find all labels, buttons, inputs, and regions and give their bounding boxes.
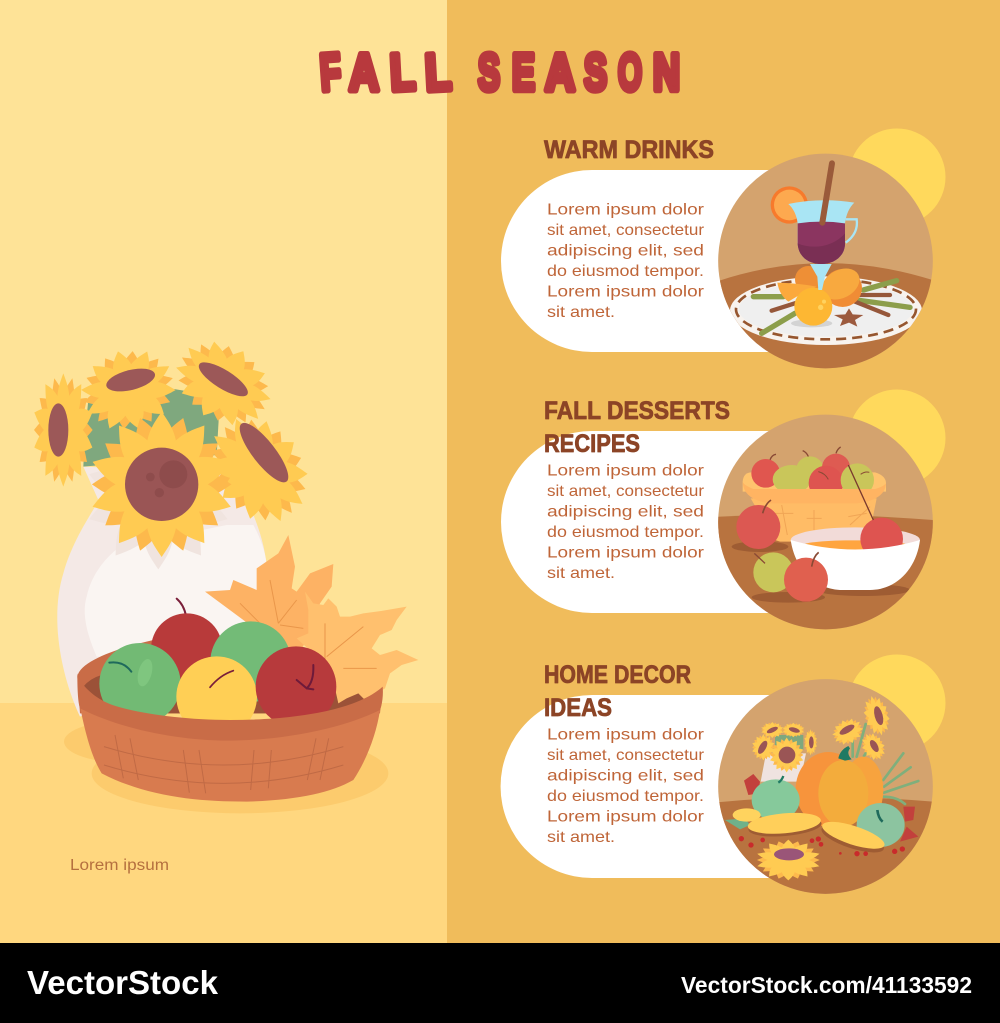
panel: fall desserts recipes xyxy=(501,390,946,635)
heading: home decor ideas xyxy=(501,654,946,878)
heading: fall desserts recipes: FALL DESSERTS xyxy=(544,397,730,425)
white text pill xyxy=(501,431,800,613)
body text: sit amet, consectetur xyxy=(547,483,705,500)
title: S xyxy=(584,44,607,102)
body text xyxy=(547,202,705,321)
title: F xyxy=(318,43,343,103)
body text: sit amet. xyxy=(547,565,615,582)
basket weave xyxy=(104,735,343,793)
sunflower top left xyxy=(59,328,198,452)
body text xyxy=(547,726,705,846)
sunflower right xyxy=(172,382,344,558)
green foliage xyxy=(83,388,220,467)
title: L xyxy=(389,43,417,102)
vase xyxy=(57,424,267,717)
heading: home decor ideas: HOME DECOR xyxy=(544,661,691,689)
basket body xyxy=(80,707,380,802)
right background xyxy=(447,0,1000,943)
body text: Lorem ipsum dolor xyxy=(547,462,705,480)
body text: adipiscing elit, sed xyxy=(547,768,704,784)
body text: adipiscing elit, sed xyxy=(547,242,704,260)
panel: home decor ideas xyxy=(501,654,946,900)
white text pill xyxy=(501,695,800,878)
heading: warm drinks: WARM DRINKS xyxy=(544,136,714,164)
body text: Lorem ipsum dolor xyxy=(547,726,705,744)
basket rim xyxy=(77,673,383,741)
title: O xyxy=(618,44,642,102)
footer url: VectorStock.com/41133592 xyxy=(681,972,972,998)
body text: sit amet, consectetur xyxy=(547,222,705,239)
title: A xyxy=(545,44,575,102)
footer bar xyxy=(0,943,1000,1023)
body text: Lorem ipsum dolor xyxy=(547,544,705,562)
icon: pumpkins corn and sunflowers xyxy=(713,679,937,900)
sunflower main xyxy=(73,396,251,573)
illustration: sunflowers vase and apple basket xyxy=(26,311,418,813)
caption: Lorem ipsum xyxy=(70,857,169,874)
title: N xyxy=(653,44,680,102)
body text: do eiusmod tempor. xyxy=(547,788,704,805)
basket inside xyxy=(77,640,383,713)
apples xyxy=(99,599,336,737)
body text: sit amet. xyxy=(547,304,615,321)
heading: fall desserts recipes xyxy=(501,390,946,613)
heading: fall desserts recipes: RECIPES xyxy=(544,430,640,458)
yellow sun circle xyxy=(848,128,946,226)
body text xyxy=(547,462,705,582)
title: E xyxy=(512,44,535,102)
body text: Lorem ipsum dolor xyxy=(547,202,705,218)
floor shadows xyxy=(64,720,388,813)
body text: Lorem ipsum dolor xyxy=(547,284,705,300)
body text: do eiusmod tempor. xyxy=(547,524,704,541)
icon: mulled wine on plate xyxy=(713,154,937,373)
body text: sit amet. xyxy=(547,829,615,846)
yellow sun circle xyxy=(848,390,946,486)
footer logo: VectorStock xyxy=(27,964,219,1001)
left background xyxy=(0,0,447,703)
icon: apples basket and bowl xyxy=(713,415,937,635)
sunflower top right xyxy=(146,311,300,455)
yellow sun circle xyxy=(848,654,946,752)
heading: home decor ideas: IDEAS xyxy=(544,694,612,722)
maple leaf front xyxy=(297,592,418,705)
maple leaf back xyxy=(205,535,333,652)
body text: adipiscing elit, sed xyxy=(547,504,704,520)
title: A xyxy=(349,44,379,102)
body text: do eiusmod tempor. xyxy=(547,263,704,280)
white text pill xyxy=(501,170,800,352)
body text: sit amet, consectetur xyxy=(547,747,705,764)
panel: warm drinks xyxy=(501,128,946,373)
body text: Lorem ipsum dolor xyxy=(547,808,705,826)
title xyxy=(318,43,680,103)
sunflower left xyxy=(26,361,101,499)
left floor xyxy=(0,703,447,943)
title: L xyxy=(424,43,453,103)
title: S xyxy=(478,44,500,102)
